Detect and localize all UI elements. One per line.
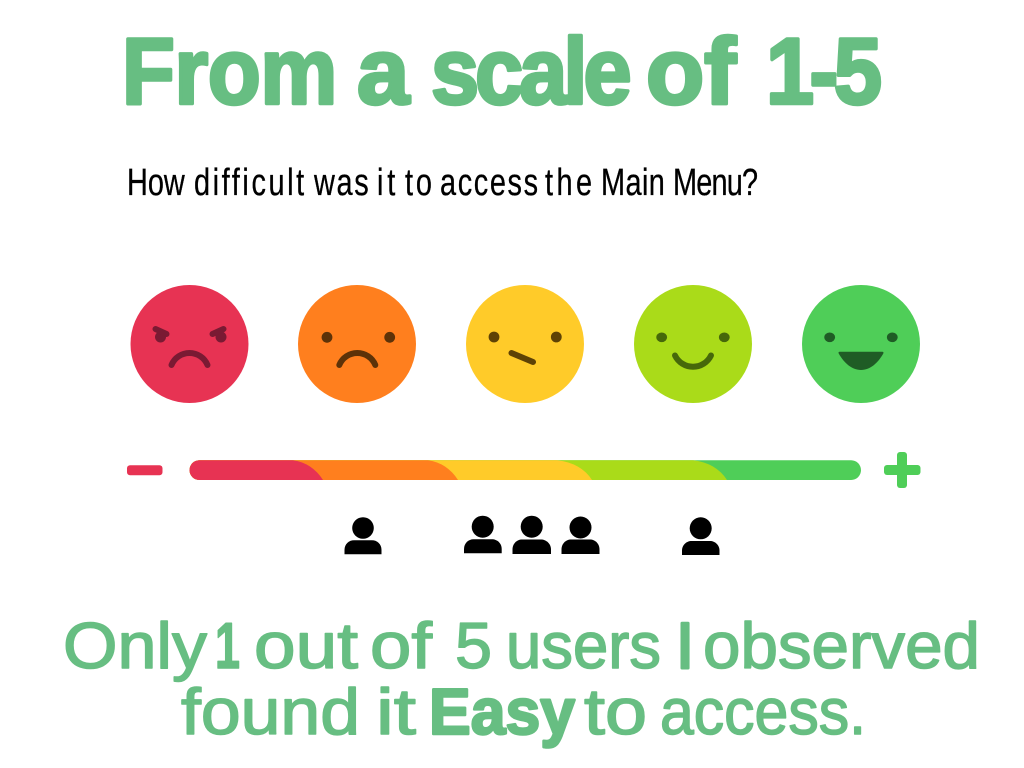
- title: 1-5: [766, 19, 882, 124]
- conclusion line 1: of: [370, 609, 433, 682]
- icon: user 5: [682, 517, 720, 555]
- icon: angry red face: [130, 285, 248, 403]
- conclusion line 1: I: [676, 609, 694, 682]
- conclusion line 1: 5: [455, 609, 492, 682]
- user markers: [344, 516, 720, 555]
- conclusion line 2: [181, 675, 866, 748]
- question text: Menu?: [673, 161, 758, 204]
- icon: minus sign: [127, 465, 162, 475]
- icon: sad orange face: [298, 285, 416, 403]
- conclusion line 1: Only: [63, 609, 208, 682]
- icon: plus sign: [884, 452, 920, 488]
- conclusion line 1: 1: [215, 609, 240, 682]
- conclusion line 2: it: [376, 675, 416, 748]
- title: scale: [431, 19, 632, 124]
- question text: to: [405, 161, 432, 204]
- conclusion text: [63, 609, 980, 748]
- question text: Main: [601, 161, 665, 204]
- conclusion line 2: found: [181, 675, 360, 748]
- title: a: [357, 18, 410, 124]
- icon: neutral yellow face: [466, 285, 584, 403]
- icon: user 2: [464, 516, 502, 553]
- conclusion line 1: [63, 609, 980, 682]
- conclusion line 2: access.: [660, 675, 866, 748]
- question text: was: [313, 161, 369, 204]
- conclusion line 1: observed: [703, 609, 980, 682]
- title: of: [646, 18, 737, 124]
- conclusion line 2: to: [584, 675, 647, 748]
- conclusion line 1: out: [254, 609, 358, 682]
- conclusion line 2: Easy: [429, 675, 575, 748]
- gradient scale bar: [190, 460, 861, 480]
- icon: smiling lime face: [634, 285, 752, 403]
- rating faces: [130, 285, 920, 403]
- question text: it: [377, 161, 396, 204]
- question text: difficult: [194, 161, 305, 204]
- question text: How: [127, 161, 185, 204]
- conclusion line 1: users: [506, 609, 661, 682]
- icon: user 3: [512, 516, 551, 554]
- question text: access: [440, 161, 538, 204]
- icon: user 4: [562, 516, 600, 554]
- question text: [127, 161, 758, 204]
- title: From: [122, 19, 337, 124]
- title: [122, 18, 882, 124]
- icon: user 1: [344, 517, 382, 554]
- question text: the: [545, 161, 592, 204]
- icon: happy green face: [802, 285, 920, 403]
